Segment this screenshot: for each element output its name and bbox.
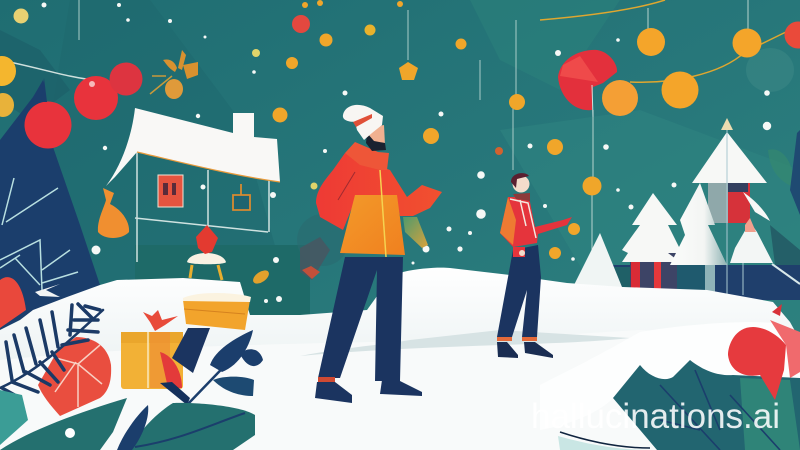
leafy plant foreground — [187, 330, 263, 405]
tree trunks band — [613, 265, 800, 300]
house — [98, 108, 280, 262]
right boot — [380, 380, 422, 396]
dark tree left — [0, 80, 100, 330]
pine branch — [0, 304, 103, 398]
hat — [343, 105, 383, 140]
lamp box on stand — [160, 225, 271, 405]
snow dots — [42, 2, 771, 303]
watermark: hallucinations.ai — [531, 397, 780, 436]
snow trees — [573, 118, 800, 300]
red jacket upper — [316, 153, 442, 230]
cuff — [318, 377, 335, 382]
head — [368, 125, 385, 150]
ornament: red baubles — [24, 62, 142, 148]
gift: red left — [0, 277, 26, 328]
window left — [158, 175, 183, 207]
ornament: large red flower — [558, 50, 617, 117]
ornament: orange lights right — [602, 22, 800, 116]
snow ground — [0, 268, 800, 450]
window right — [233, 184, 250, 210]
gift: red round — [38, 337, 111, 416]
jacket — [500, 197, 572, 247]
legs — [497, 245, 541, 337]
legs — [318, 257, 403, 381]
back arm item — [403, 217, 428, 248]
hair — [511, 173, 529, 188]
orange jacket lower — [340, 195, 405, 255]
scarf — [513, 193, 530, 201]
sack — [98, 188, 129, 238]
gift: yellow — [121, 310, 183, 389]
ornament: yellow lights left — [0, 8, 28, 117]
garland strings — [0, 0, 790, 250]
collar — [345, 142, 389, 170]
man with beard — [315, 105, 442, 403]
leaves foreground left — [0, 398, 255, 450]
holly leaf foreground right — [558, 304, 800, 450]
teal leaf left edge — [0, 390, 28, 445]
small lights and dots — [252, 0, 602, 259]
beard — [366, 133, 386, 151]
small figure — [497, 173, 572, 358]
right green leaf — [768, 130, 800, 285]
left boot — [315, 382, 352, 403]
head — [512, 176, 530, 192]
ornament: gold bow — [150, 50, 198, 99]
